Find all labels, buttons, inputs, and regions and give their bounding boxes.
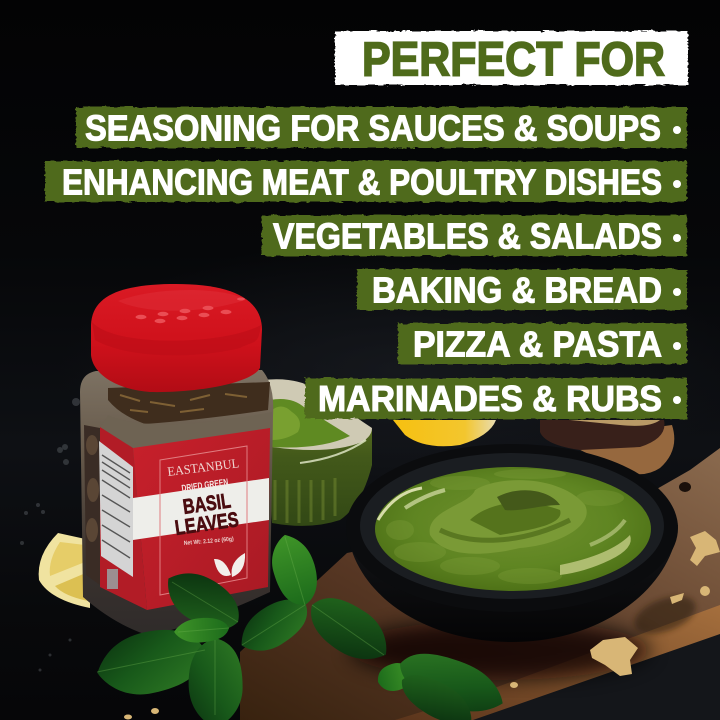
- list of uses: [45, 107, 687, 419]
- brand name: EASTANBUL: [167, 455, 240, 479]
- use: baking and bread: BAKING & BREAD: [372, 270, 662, 310]
- lemon slice behind bowl: [393, 420, 496, 446]
- jar body: [80, 370, 273, 636]
- dried basil contents: [108, 382, 270, 424]
- use: sauces and soups: SEASONING FOR SAUCES & SOUPS: [85, 108, 661, 148]
- use: marinades and rubs: MARINADES & RUBS: [318, 378, 662, 419]
- spice jar: [80, 370, 273, 636]
- small pesto glass: [262, 379, 372, 526]
- basil sprig: [91, 529, 399, 720]
- pesto sauce: [375, 467, 651, 591]
- crumbled nuts: [124, 531, 720, 720]
- product name leaves: LEAVES: [173, 508, 240, 540]
- basil leaf lower right: [374, 642, 511, 720]
- sparkle specks: [20, 398, 80, 672]
- toast on wooden plate: [540, 420, 674, 474]
- leaf: left large: [91, 621, 212, 703]
- leaf: top centre: [156, 560, 250, 642]
- brand frame: [160, 446, 247, 595]
- spice jar lid: [91, 284, 262, 392]
- cutting board: [240, 448, 720, 720]
- nutrition panel: [99, 441, 133, 577]
- jar label: [99, 427, 270, 610]
- use: pizza and pasta: PIZZA & PASTA: [413, 324, 662, 364]
- product subtitle: DRIED GREEN: [181, 477, 229, 494]
- QR code: [107, 569, 118, 589]
- leaf: small centre: [173, 616, 230, 644]
- use: vegetables and salads: VEGETABLES & SALADS: [273, 216, 662, 256]
- white band: [133, 478, 269, 540]
- leaf: upright: [265, 529, 324, 611]
- heading: PERFECT FOR: [362, 34, 665, 86]
- leaf logo: [214, 553, 245, 577]
- product name basil: BASIL: [181, 489, 232, 519]
- net weight: Net Wt: 2.12 oz (60g): [184, 537, 234, 547]
- leaf: bottom centre: [189, 638, 243, 720]
- pesto bowl: [346, 444, 678, 642]
- lemon wedge: [39, 533, 90, 608]
- leaf: right big: [299, 585, 399, 674]
- shaker holes: [136, 298, 245, 323]
- leaf: right middle: [231, 589, 317, 662]
- banner: perfect for: [335, 31, 688, 86]
